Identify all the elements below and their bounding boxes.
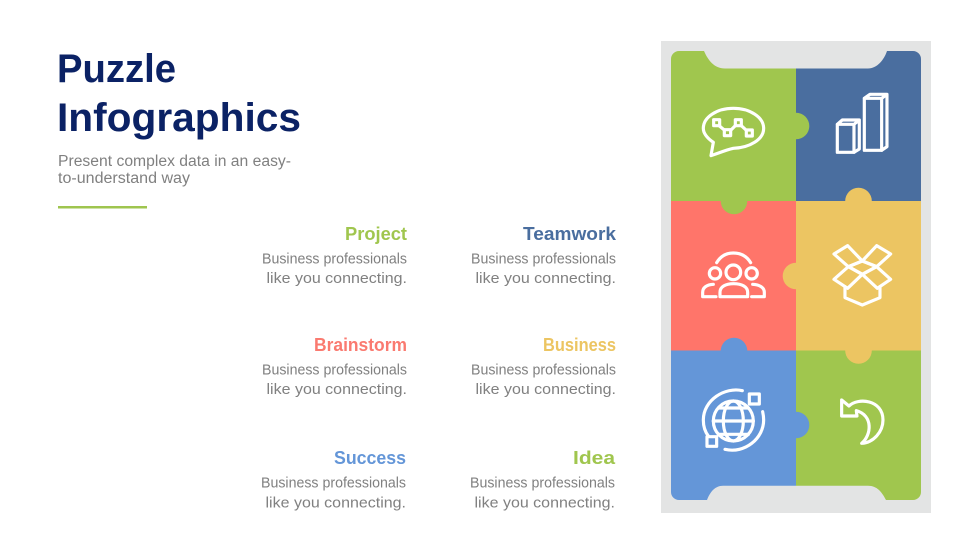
- text block: Brainstorm: Business professionals: [262, 362, 407, 378]
- text block: Success: like you connecting.: [266, 496, 406, 512]
- panel: puzzle background: [661, 41, 931, 513]
- text block: Project: [262, 224, 407, 287]
- tab: green into coral: [721, 188, 747, 214]
- text block: Idea: Idea: [573, 448, 616, 468]
- tab: yellow into green: [845, 337, 872, 364]
- text block: Business: like you connecting.: [476, 382, 616, 398]
- tab: yellow into navy: [845, 188, 872, 214]
- text block: Project: Business professionals: [262, 252, 407, 268]
- text block: Idea: [470, 448, 616, 512]
- icon: open box: [834, 246, 891, 305]
- title: [57, 47, 301, 140]
- text block: Project: Project: [345, 224, 407, 244]
- text block: Brainstorm: Brainstorm: [314, 335, 407, 355]
- accent rule: [58, 206, 147, 208]
- text block: Business: Business professionals: [471, 362, 616, 378]
- text block: Success: Success: [334, 448, 406, 468]
- icon: 3D bar chart: [837, 94, 887, 152]
- piece: middle left coral: [671, 201, 796, 350]
- piece: middle right yellow: [796, 201, 921, 350]
- tab: green into navy: [783, 113, 809, 139]
- title: Infographics: [57, 96, 301, 140]
- icon: team of people: [703, 253, 764, 297]
- text block: Teamwork: [471, 224, 617, 287]
- title: Puzzle: [57, 47, 176, 91]
- icon: return arrow: [842, 400, 883, 443]
- text block: Idea: Business professionals: [470, 476, 615, 492]
- text block: Project: like you connecting.: [266, 271, 407, 287]
- text block: Business: [471, 335, 616, 398]
- tab: blue into coral: [721, 338, 747, 364]
- subtitle: Present complex data in an easy-: [58, 153, 291, 170]
- subtitle: [58, 153, 291, 187]
- text block: Teamwork: Teamwork: [523, 224, 617, 244]
- piece: bottom left blue: [671, 350, 796, 500]
- text block: Brainstorm: like you connecting.: [266, 382, 407, 398]
- tab: yellow into coral: [783, 263, 809, 289]
- subtitle: to-understand way: [58, 170, 190, 187]
- text block: Idea: like you connecting.: [474, 496, 615, 512]
- piece: top right navy: [796, 51, 921, 201]
- text block: Brainstorm: [262, 335, 407, 398]
- icon: speech bubble with network: [703, 108, 764, 156]
- text block: Teamwork: Business professionals: [471, 252, 616, 268]
- tab: blue into green: [783, 412, 809, 438]
- text block: Success: [261, 448, 406, 512]
- icon: globe with orbit: [703, 390, 764, 450]
- text block: Teamwork: like you connecting.: [476, 271, 616, 287]
- text block: Business: Business: [543, 335, 616, 355]
- piece: top left green: [671, 51, 796, 201]
- text block: Success: Business professionals: [261, 476, 406, 492]
- piece: bottom right green: [796, 350, 921, 500]
- puzzle: six interlocking pieces: [671, 51, 921, 500]
